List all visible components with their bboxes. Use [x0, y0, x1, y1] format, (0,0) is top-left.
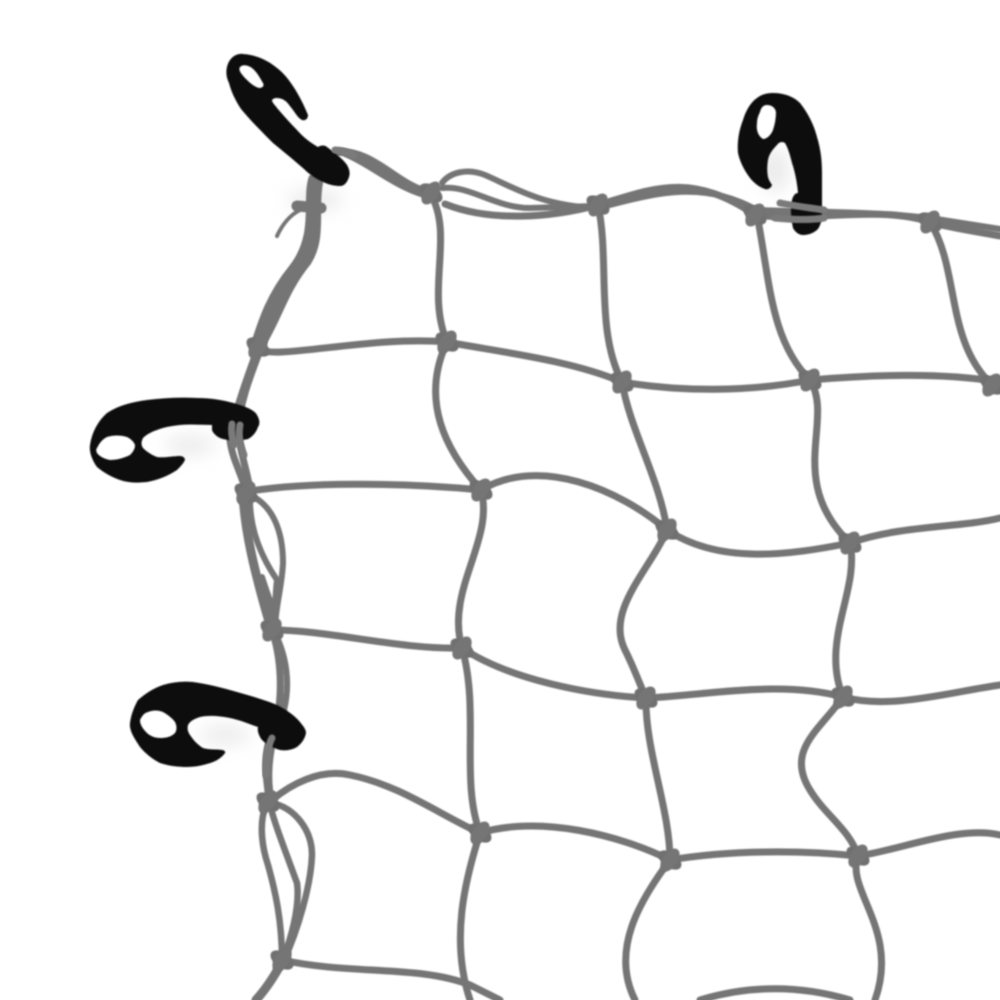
horizontal row 2 — [258, 341, 1000, 389]
hook: middle left — [90, 398, 259, 483]
horizontal row 6 — [282, 960, 500, 1000]
top edge cords — [336, 152, 430, 193]
horizontal row 3 — [245, 476, 1000, 554]
hook: lower left — [130, 682, 306, 767]
soft shadows — [164, 148, 789, 744]
net cords — [230, 152, 1000, 1000]
hook: top left — [226, 54, 350, 186]
vertical column 3 — [757, 215, 882, 1000]
cords passing in front of hooks — [232, 150, 824, 775]
left bundle row 5 to row 6 — [262, 805, 282, 960]
net knots — [231, 178, 1000, 975]
hook: top right — [738, 93, 822, 235]
vertical column 2 — [598, 205, 670, 1000]
horizontal row 5 — [272, 773, 1000, 860]
horizontal row 4 — [272, 630, 1000, 702]
vertical column 4 — [930, 222, 992, 385]
left bundle row 4 to hook — [266, 630, 280, 802]
vertical column 1 — [430, 193, 484, 1000]
left bundle row 3 to row 4 — [243, 495, 270, 625]
left edge cords — [230, 170, 318, 492]
